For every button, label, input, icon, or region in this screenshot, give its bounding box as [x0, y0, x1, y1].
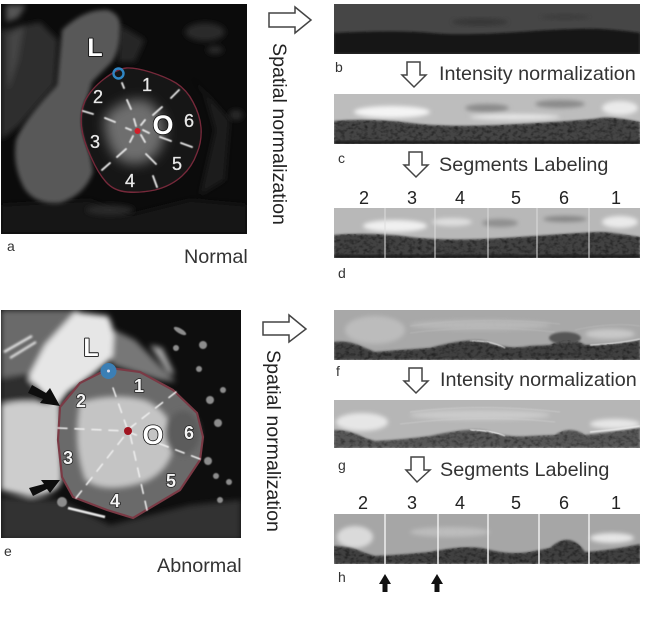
text: segments labeling top: Segments Labeling — [439, 154, 608, 176]
segment numbers d: 1 — [611, 188, 621, 208]
label a: a — [7, 238, 15, 254]
label c: c — [338, 150, 345, 166]
segment numbers: 6 — [184, 111, 194, 131]
arrow: boundary marker 2 — [431, 574, 443, 592]
segment numbers: 1 — [134, 376, 144, 396]
myocardium and cavity — [81, 68, 201, 192]
strip h — [334, 514, 640, 564]
segment numbers: 4 — [125, 171, 135, 191]
label h: h — [338, 569, 346, 585]
arrow: spatial normalization bottom — [263, 315, 306, 342]
segment numbers: 1 — [142, 75, 152, 95]
text: segments labeling bottom: Segments Labeling — [440, 459, 609, 481]
segment numbers: 6 — [184, 423, 194, 443]
label g: g — [338, 457, 346, 473]
segment numbers: 3 — [63, 448, 73, 468]
heading: spatial normalization top: Spatial normalization — [268, 43, 290, 225]
label d: d — [338, 265, 346, 281]
strip g — [334, 400, 640, 448]
segment numbers h: 6 — [559, 493, 569, 513]
segment numbers d: 6 — [559, 188, 569, 208]
text: intensity normalization bottom: Intensity normalization — [440, 369, 637, 391]
segment numbers h: 4 — [455, 493, 465, 513]
heading: spatial normalization bottom: Spatial normalization — [262, 350, 284, 532]
segment numbers d: 2 — [359, 188, 369, 208]
segment numbers — [90, 75, 194, 191]
arrow: intensity normalization bottom — [404, 368, 428, 393]
segment numbers h: 2 — [358, 493, 368, 513]
segment numbers: 5 — [172, 154, 182, 174]
arrow: spatial normalization top — [269, 7, 311, 33]
label b: b — [335, 59, 343, 75]
segment numbers h — [358, 493, 621, 513]
arrow: segments labeling bottom — [406, 457, 430, 482]
segment numbers d: 4 — [455, 188, 465, 208]
segment numbers: 4 — [110, 491, 120, 511]
O label: O — [152, 110, 174, 140]
segment numbers d — [359, 188, 621, 208]
segment numbers h: 3 — [407, 493, 417, 513]
arrow: boundary marker 1 — [379, 574, 391, 592]
strip b — [334, 4, 640, 54]
label Normal: Normal — [184, 246, 248, 268]
segment numbers: 2 — [76, 391, 86, 411]
sector lines — [83, 83, 192, 187]
arrow: intensity normalization top — [402, 62, 426, 87]
segment numbers: 3 — [90, 132, 100, 152]
centre point — [124, 427, 132, 435]
apex marker — [100, 363, 116, 379]
panel e: abnormal cardiac MRI — [1, 310, 241, 540]
label f: f — [336, 363, 340, 379]
myocardium and cavity — [58, 368, 203, 518]
sector lines — [58, 388, 200, 510]
segment numbers: 5 — [166, 471, 176, 491]
segment numbers h: 1 — [611, 493, 621, 513]
arrow: segments labeling top — [404, 152, 428, 177]
L label: L — [87, 34, 103, 62]
L label: L — [83, 334, 99, 362]
O label: O — [142, 420, 164, 450]
segment numbers: 2 — [93, 87, 103, 107]
segment numbers h: 5 — [511, 493, 521, 513]
strip c — [334, 94, 640, 144]
text: intensity normalization top: Intensity normalization — [439, 63, 636, 85]
segment numbers d: 5 — [511, 188, 521, 208]
apex marker — [114, 68, 124, 78]
strip d — [334, 208, 640, 258]
segment numbers — [63, 376, 194, 511]
label e: e — [4, 543, 12, 559]
label Abnormal: Abnormal — [157, 555, 242, 577]
strip f — [334, 310, 640, 360]
bright dots — [57, 325, 232, 507]
myocardial contour — [81, 68, 201, 192]
myocardial contour — [58, 368, 203, 518]
centre point — [134, 128, 140, 134]
segment numbers d: 3 — [407, 188, 417, 208]
panel a: normal cardiac MRI — [1, 4, 247, 234]
black arrows — [28, 385, 60, 496]
